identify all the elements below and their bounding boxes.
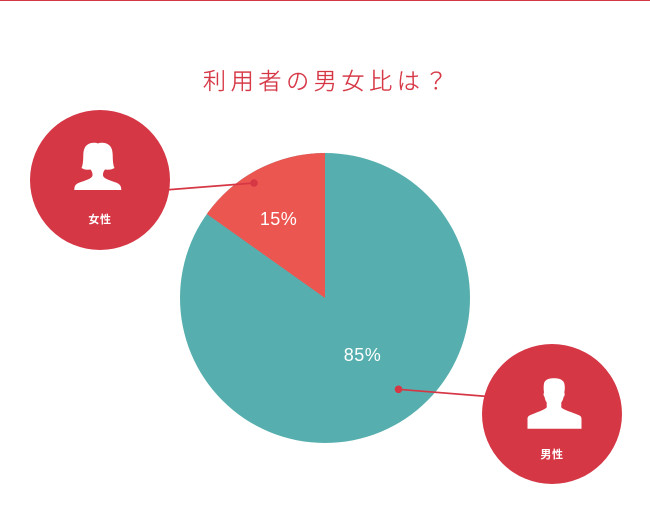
top border line	[0, 0, 650, 1]
icon: female silhouette	[74, 143, 121, 190]
connector: female	[165, 179, 258, 190]
label: female: 女性	[88, 212, 112, 226]
label: 15%: 15%	[260, 209, 297, 229]
badge: female	[30, 110, 170, 250]
pie slice: male 85%	[180, 153, 470, 443]
badge: male	[482, 344, 622, 484]
title: 利用者の男女比は？	[203, 68, 452, 94]
connector: male	[395, 386, 488, 396]
label: 85%: 85%	[344, 345, 381, 365]
icon: male silhouette	[528, 378, 582, 429]
pie chart	[180, 153, 470, 443]
label: male: 男性	[540, 447, 564, 461]
pie slice: female 15%	[207, 153, 325, 298]
